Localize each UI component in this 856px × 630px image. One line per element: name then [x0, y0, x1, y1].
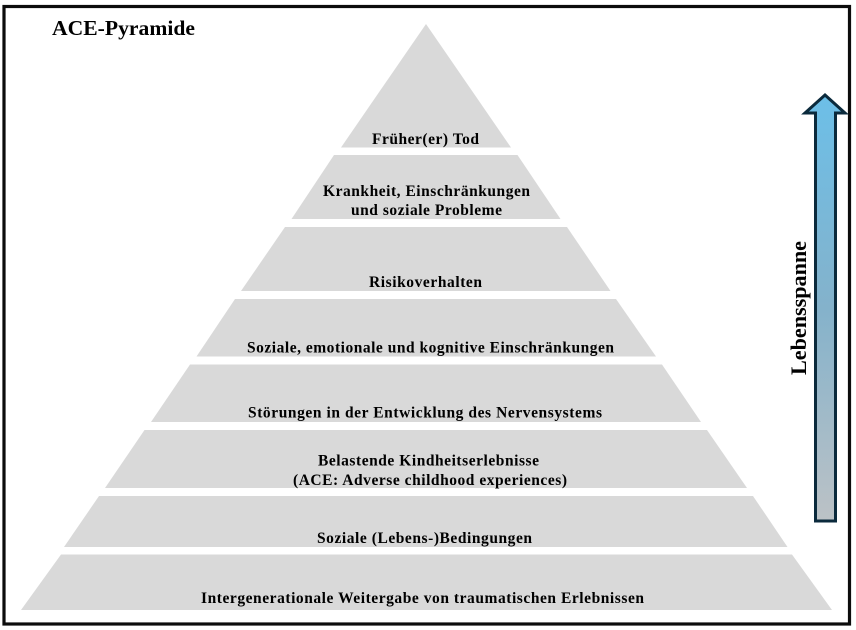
tier: Soziale (Lebens-)Bedingungen: Soziale (Lebens-)Bedingungen — [317, 530, 532, 547]
label: Lebensspanne: Lebensspanne — [786, 241, 811, 375]
tier: Störungen in der Entwicklung des Nervensystems: Störungen in der Entwicklung des Nervensystems — [248, 404, 602, 422]
title: ACE-Pyramide — [52, 16, 195, 40]
tier: Soziale (Lebens-)Bedingungen — [64, 496, 788, 547]
tier: Krankheit, Einschränkungen und soziale Probleme: Krankheit, Einschränkungen — [323, 183, 530, 200]
tier: Risikoverhalten: Risikoverhalten — [369, 274, 482, 291]
tier: Belastende Kindheitserlebnisse: (ACE: Adverse childhood experiences) — [293, 472, 567, 489]
tier: Intergenerationale Weitergabe: Intergenerationale Weitergabe von traumatischen Erlebnissen — [201, 590, 644, 607]
tier: Soziale, emotionale und kognitive Einschränkungen: Soziale, emotionale und kognitive Einschränkungen — [247, 340, 614, 356]
tier: Risikoverhalten — [241, 227, 610, 291]
tier: Krankheit, Einschränkungen und soziale Probleme — [292, 155, 560, 219]
arrow: Lebensspanne direction — [805, 95, 845, 521]
tier: Früher(er) Tod: Früher(er) Tod — [372, 131, 479, 148]
tier: Intergenerationale Weitergabe — [21, 554, 832, 610]
tier: Störungen in der Entwicklung des Nervensystems — [151, 364, 701, 422]
tier: Soziale, emotionale und kognitive Einschränkungen — [196, 299, 656, 356]
tier: Belastende Kindheitserlebnisse — [105, 430, 747, 489]
tier: Belastende Kindheitserlebnisse: Belastende Kindheitserlebnisse — [318, 452, 539, 470]
tier: Früher(er) Tod — [341, 24, 511, 148]
tier: Krankheit, Einschränkungen und soziale Probleme: und soziale Probleme — [351, 202, 502, 219]
